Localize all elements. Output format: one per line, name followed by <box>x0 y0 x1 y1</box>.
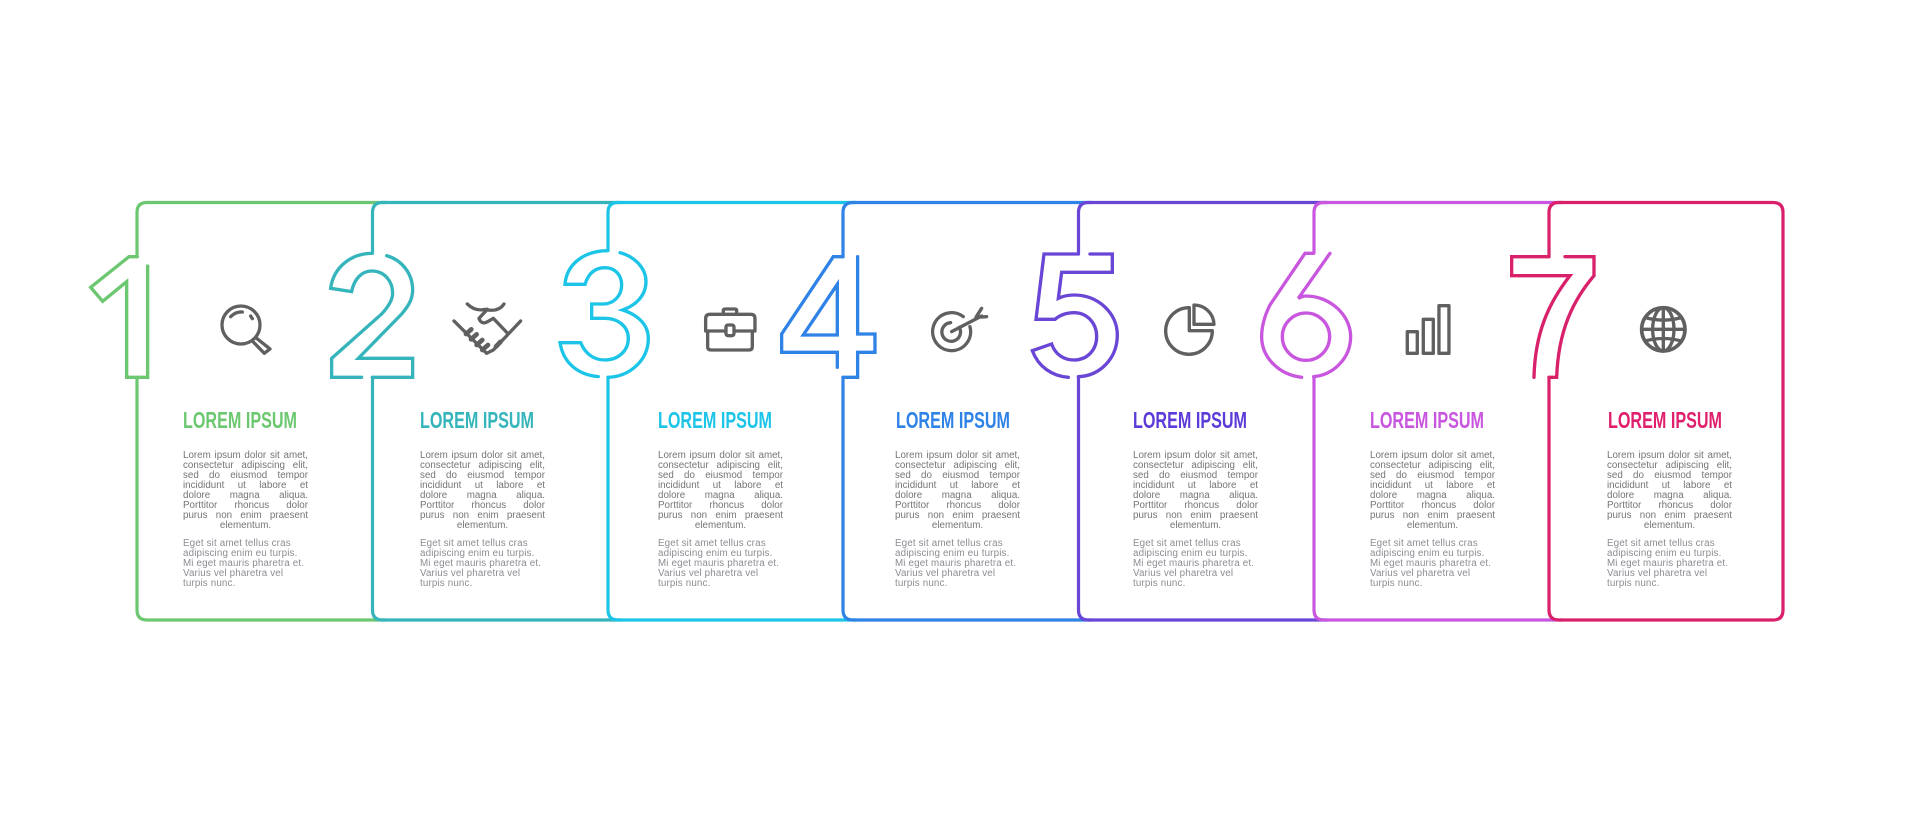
body text panel 1: adipiscing enim eu turpis. <box>183 548 297 559</box>
icon: handshake <box>454 304 521 353</box>
body text panel 4: Mi eget mauris pharetra et. <box>895 558 1016 569</box>
panel 7 frame <box>1549 202 1783 620</box>
body text panel 3: dolore magna aliqua. <box>658 490 783 501</box>
body text panel 5: Porttitor rhoncus dolor <box>1133 500 1258 511</box>
numeral 3 <box>560 251 648 377</box>
panel 6 frame <box>1314 202 1562 620</box>
body text panel 6: consectetur adipiscing elit, <box>1370 460 1495 471</box>
numeral 2 <box>331 253 413 377</box>
icon: globe <box>1642 308 1685 351</box>
body text panel 1: consectetur adipiscing elit, <box>183 460 308 471</box>
icon: pie chart <box>1166 305 1214 354</box>
panel 3 <box>560 202 856 620</box>
body text panel 2: sed do eiusmod tempor <box>420 470 545 481</box>
body text panel 7: Varius vel pharetra vel <box>1607 568 1707 579</box>
body text panel 6: Eget sit amet tellus cras <box>1370 538 1478 549</box>
body text panel 7: elementum. <box>1644 520 1695 531</box>
body text panel 7: Porttitor rhoncus dolor <box>1607 500 1732 511</box>
body text panel 3: elementum. <box>695 520 746 531</box>
body text panel 5: Varius vel pharetra vel <box>1133 568 1233 579</box>
body text panel 7 <box>1607 450 1732 589</box>
body text panel 5: Lorem ipsum dolor sit amet, <box>1133 450 1258 461</box>
body text panel 1: sed do eiusmod tempor <box>183 470 308 481</box>
panel 3 frame <box>608 202 856 620</box>
body text panel 7: Lorem ipsum dolor sit amet, <box>1607 450 1732 461</box>
body text panel 5: consectetur adipiscing elit, <box>1133 460 1258 471</box>
body text panel 6: dolore magna aliqua. <box>1370 490 1495 501</box>
body text panel 2: consectetur adipiscing elit, <box>420 460 545 471</box>
body text panel 1: Eget sit amet tellus cras <box>183 538 291 549</box>
body text panel 1: Varius vel pharetra vel <box>183 568 283 579</box>
body text panel 3: adipiscing enim eu turpis. <box>658 548 772 559</box>
numeral 4 <box>782 257 875 377</box>
body text panel 5: adipiscing enim eu turpis. <box>1133 548 1247 559</box>
numeral 6 inner circle <box>1282 313 1330 360</box>
body text panel 5: turpis nunc. <box>1133 578 1185 589</box>
body text panel 7: Mi eget mauris pharetra et. <box>1607 558 1728 569</box>
body text panel 5: Eget sit amet tellus cras <box>1133 538 1241 549</box>
panel 2 frame <box>372 202 621 620</box>
body text panel 4: Varius vel pharetra vel <box>895 568 995 579</box>
body text panel 4: Porttitor rhoncus dolor <box>895 500 1020 511</box>
heading 6: LOREM IPSUM <box>1370 407 1484 433</box>
body text panel 3: incididunt ut labore et <box>658 480 783 491</box>
numeral 7 <box>1512 257 1594 377</box>
body text panel 7: incididunt ut labore et <box>1607 480 1732 491</box>
body text panel 1: purus non enim praesent <box>183 510 308 521</box>
panel 4 frame <box>843 202 1091 620</box>
body text panel 3: purus non enim praesent <box>658 510 783 521</box>
body text panel 4: consectetur adipiscing elit, <box>895 460 1020 471</box>
panel 6 <box>1262 202 1562 620</box>
body text panel 2: elementum. <box>457 520 508 531</box>
body text panel 7: Eget sit amet tellus cras <box>1607 538 1715 549</box>
body text panel 6: sed do eiusmod tempor <box>1370 470 1495 481</box>
body text panel 4: Eget sit amet tellus cras <box>895 538 1003 549</box>
body text panel 1: elementum. <box>220 520 271 531</box>
body text panel 6: Lorem ipsum dolor sit amet, <box>1370 450 1495 461</box>
body text panel 6: Mi eget mauris pharetra et. <box>1370 558 1491 569</box>
body text panel 7: adipiscing enim eu turpis. <box>1607 548 1721 559</box>
body text panel 2: turpis nunc. <box>420 578 472 589</box>
body text panel 2: Varius vel pharetra vel <box>420 568 520 579</box>
body text panel 3: sed do eiusmod tempor <box>658 470 783 481</box>
body text panel 3: Porttitor rhoncus dolor <box>658 500 783 511</box>
body text panel 2: Eget sit amet tellus cras <box>420 538 528 549</box>
body text panel 6: adipiscing enim eu turpis. <box>1370 548 1484 559</box>
heading 5: LOREM IPSUM <box>1133 407 1247 433</box>
body text panel 7: dolore magna aliqua. <box>1607 490 1732 501</box>
body text panel 2: dolore magna aliqua. <box>420 490 545 501</box>
body text panel 2: adipiscing enim eu turpis. <box>420 548 534 559</box>
body text panel 2: Lorem ipsum dolor sit amet, <box>420 450 545 461</box>
body text panel 4: sed do eiusmod tempor <box>895 470 1020 481</box>
body text panel 1: Lorem ipsum dolor sit amet, <box>183 450 308 461</box>
body text panel 6 <box>1370 450 1495 589</box>
body text panel 1: Mi eget mauris pharetra et. <box>183 558 304 569</box>
body text panel 1: Porttitor rhoncus dolor <box>183 500 308 511</box>
body text panel 4: turpis nunc. <box>895 578 947 589</box>
icon: briefcase <box>706 309 755 350</box>
body text panel 6: purus non enim praesent <box>1370 510 1495 521</box>
body text panel 1: turpis nunc. <box>183 578 235 589</box>
body text panel 7: sed do eiusmod tempor <box>1607 470 1732 481</box>
panel 5 <box>1032 202 1327 620</box>
body text panel 6: Varius vel pharetra vel <box>1370 568 1470 579</box>
body text panel 4 <box>895 450 1020 589</box>
panel 2 <box>331 202 621 620</box>
body text panel 7: turpis nunc. <box>1607 578 1659 589</box>
body text panel 4: Lorem ipsum dolor sit amet, <box>895 450 1020 461</box>
panel 4 <box>782 202 1091 620</box>
panel 1 <box>91 202 386 620</box>
heading 2: LOREM IPSUM <box>420 407 534 433</box>
heading 1: LOREM IPSUM <box>183 407 297 433</box>
body text panel 5: purus non enim praesent <box>1133 510 1258 521</box>
body text panel 3 <box>658 450 783 589</box>
panel 7 <box>1512 202 1783 620</box>
body text panel 4: incididunt ut labore et <box>895 480 1020 491</box>
icon: bar chart <box>1407 306 1449 353</box>
body text panel 5: dolore magna aliqua. <box>1133 490 1258 501</box>
body text panel 3: Lorem ipsum dolor sit amet, <box>658 450 783 461</box>
body text panel 5: elementum. <box>1170 520 1221 531</box>
heading 3: LOREM IPSUM <box>658 407 772 433</box>
body text panel 6: Porttitor rhoncus dolor <box>1370 500 1495 511</box>
body text panel 3: Mi eget mauris pharetra et. <box>658 558 779 569</box>
body text panel 4: adipiscing enim eu turpis. <box>895 548 1009 559</box>
icon: target with arrow <box>933 308 987 351</box>
icon: magnifying glass <box>222 306 270 353</box>
heading 4: LOREM IPSUM <box>896 407 1010 433</box>
panel 5 frame <box>1078 202 1327 620</box>
heading 7: LOREM IPSUM <box>1608 407 1722 433</box>
body text panel 5 <box>1133 450 1258 589</box>
body text panel 2: purus non enim praesent <box>420 510 545 521</box>
body text panel 6: incididunt ut labore et <box>1370 480 1495 491</box>
numeral 5 <box>1032 254 1117 377</box>
body text panel 6: turpis nunc. <box>1370 578 1422 589</box>
body text panel 2: incididunt ut labore et <box>420 480 545 491</box>
body text panel 7: consectetur adipiscing elit, <box>1607 460 1732 471</box>
panel 1 frame <box>137 202 386 620</box>
body text panel 3: Eget sit amet tellus cras <box>658 538 766 549</box>
body text panel 3: Varius vel pharetra vel <box>658 568 758 579</box>
body text panel 1: dolore magna aliqua. <box>183 490 308 501</box>
body text panel 3: consectetur adipiscing elit, <box>658 460 783 471</box>
body text panel 6: elementum. <box>1407 520 1458 531</box>
body text panel 4: dolore magna aliqua. <box>895 490 1020 501</box>
numeral 6 <box>1262 253 1351 377</box>
numeral 1 <box>91 257 148 377</box>
body text panel 5: Mi eget mauris pharetra et. <box>1133 558 1254 569</box>
body text panel 7: purus non enim praesent <box>1607 510 1732 521</box>
body text panel 2 <box>420 450 545 589</box>
body text panel 5: sed do eiusmod tempor <box>1133 470 1258 481</box>
body text panel 5: incididunt ut labore et <box>1133 480 1258 491</box>
body text panel 2: Porttitor rhoncus dolor <box>420 500 545 511</box>
body text panel 4: elementum. <box>932 520 983 531</box>
body text panel 1: incididunt ut labore et <box>183 480 308 491</box>
body text panel 4: purus non enim praesent <box>895 510 1020 521</box>
body text panel 3: turpis nunc. <box>658 578 710 589</box>
body text panel 1 <box>183 450 308 589</box>
body text panel 2: Mi eget mauris pharetra et. <box>420 558 541 569</box>
